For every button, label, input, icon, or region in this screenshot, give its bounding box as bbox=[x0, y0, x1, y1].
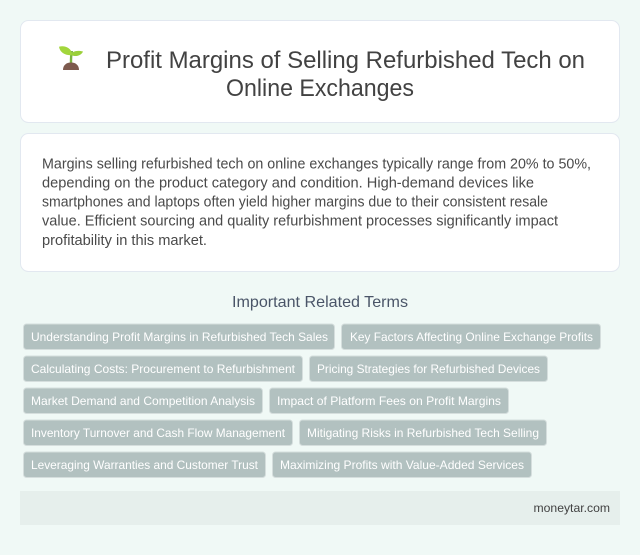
title: Online Exchanges bbox=[226, 75, 414, 102]
tag: Inventory Turnover and Cash Flow Management bbox=[31, 426, 286, 440]
tag bbox=[24, 324, 334, 350]
tag: Key Factors Affecting Online Exchange Profits bbox=[350, 330, 593, 344]
summary text: smartphones and laptops often yield higher margins due to their consistent resale bbox=[42, 194, 548, 210]
summary text: profitability in this market. bbox=[42, 233, 207, 249]
tag: Impact of Platform Fees on Profit Margins bbox=[277, 394, 501, 408]
source credit: moneytar.com bbox=[534, 501, 610, 515]
footer bbox=[20, 491, 620, 525]
tag: Pricing Strategies for Refurbished Devices bbox=[317, 362, 540, 376]
tag bbox=[24, 356, 302, 382]
summary text: Margins selling refurbished tech on online exchanges typically range from 20% to 50%, bbox=[42, 156, 591, 172]
tag bbox=[310, 356, 548, 382]
tag: Understanding Profit Margins in Refurbished Tech Sales bbox=[31, 330, 328, 344]
summary text bbox=[42, 156, 591, 249]
title bbox=[106, 47, 585, 102]
tag: Leveraging Warranties and Customer Trust bbox=[31, 458, 259, 472]
tag bbox=[24, 388, 262, 414]
summary text: depending on the product category and condition. High-demand devices like bbox=[42, 176, 534, 192]
summary text: value. Efficient sourcing and quality refurbishment processes significantly impact bbox=[42, 214, 558, 230]
tag bbox=[272, 452, 532, 478]
title: Profit Margins of Selling Refurbished Tech on bbox=[106, 47, 585, 74]
tag: Maximizing Profits with Value-Added Services bbox=[280, 458, 524, 472]
tag bbox=[24, 420, 292, 446]
tag: Market Demand and Competition Analysis bbox=[31, 394, 255, 408]
tag bbox=[24, 452, 266, 478]
tag list bbox=[24, 324, 600, 478]
tag: Calculating Costs: Procurement to Refurbishment bbox=[31, 362, 296, 376]
icon: seedling bbox=[59, 46, 83, 70]
tag bbox=[270, 388, 508, 414]
tag bbox=[300, 420, 546, 446]
heading: important related terms: Important Related Terms bbox=[232, 294, 408, 311]
tag: Mitigating Risks in Refurbished Tech Selling bbox=[307, 426, 539, 440]
panel: title card bbox=[20, 20, 620, 122]
tag bbox=[342, 324, 600, 350]
panel: summary bbox=[20, 134, 620, 272]
